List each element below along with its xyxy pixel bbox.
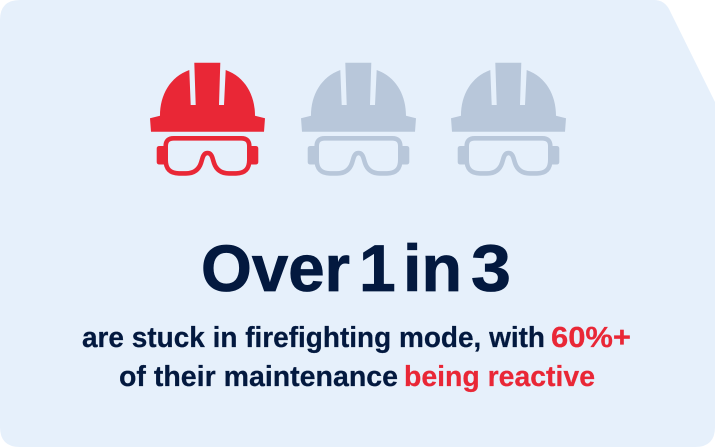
text block: description: 60%+ bbox=[551, 322, 631, 354]
text block: description bbox=[82, 322, 631, 393]
text block: description: are stuck in firefighting mode, with bbox=[82, 322, 545, 354]
heading: Over bbox=[201, 231, 350, 305]
icon: grey helmet and goggles 2 bbox=[301, 63, 416, 173]
heading: in bbox=[403, 231, 462, 305]
text block: description: being reactive bbox=[404, 361, 595, 393]
heading bbox=[201, 231, 511, 305]
heading: 3 bbox=[471, 231, 511, 305]
icon: red helmet and goggles bbox=[150, 63, 265, 173]
text block: description: of their maintenance bbox=[119, 361, 398, 393]
icon: grey helmet and goggles 3 bbox=[451, 63, 566, 173]
heading: 1 bbox=[359, 231, 396, 305]
